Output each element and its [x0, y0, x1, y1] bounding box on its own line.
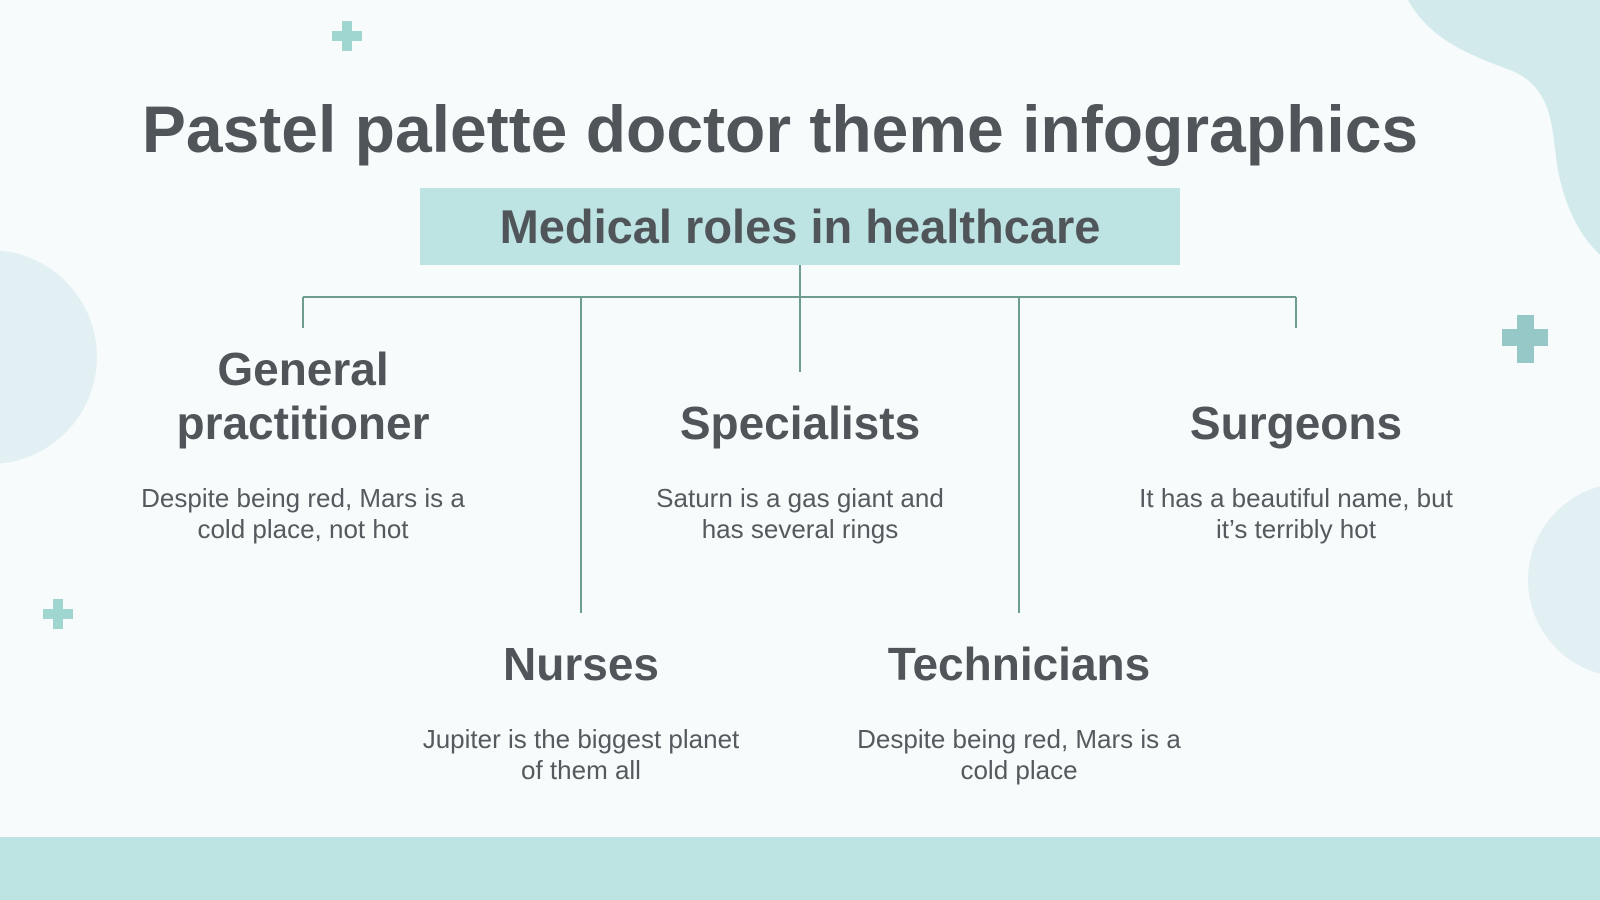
connector lines	[303, 265, 1296, 613]
footer band	[0, 837, 1600, 900]
circle: left	[0, 250, 97, 464]
blob: top right	[1408, 0, 1600, 255]
circle: right bottom	[1528, 483, 1600, 677]
text: surgeons: it’s terribly hot	[1216, 514, 1376, 544]
heading: Surgeons: Surgeons	[1190, 397, 1402, 449]
text: GP: cold place, not hot	[197, 514, 409, 544]
text: specialists	[656, 483, 944, 544]
icon: cross right	[1502, 315, 1548, 363]
text: specialists: has several rings	[702, 514, 898, 544]
heading: Nurses: Nurses	[503, 638, 659, 690]
text: technicians: cold place	[960, 755, 1078, 785]
subtitle box: Medical roles in healthcare	[500, 200, 1100, 253]
heading: Technicians: Technicians	[888, 638, 1150, 690]
text: technicians: Despite being red, Mars is a	[857, 724, 1181, 754]
text: surgeons	[1139, 483, 1453, 544]
heading: Specialists: Specialists	[680, 397, 920, 449]
heading: General practitioner	[176, 343, 430, 449]
text: nurses: of them all	[521, 755, 641, 785]
text: technicians	[857, 724, 1181, 785]
text: GP: Despite being red, Mars is a	[141, 483, 465, 513]
title: Pastel palette doctor theme infographics	[142, 92, 1418, 166]
text: specialists: Saturn is a gas giant and	[656, 483, 944, 513]
text: surgeons: It has a beautiful name, but	[1139, 483, 1453, 513]
text: GP	[141, 483, 465, 544]
heading: General practitioner: practitioner	[176, 397, 430, 449]
text: nurses: Jupiter is the biggest planet	[423, 724, 739, 754]
text: nurses	[423, 724, 740, 785]
heading: General practitioner: General	[217, 343, 389, 395]
icon: cross left	[43, 599, 73, 629]
icon: cross top	[332, 21, 362, 51]
subtitle box	[420, 188, 1180, 265]
